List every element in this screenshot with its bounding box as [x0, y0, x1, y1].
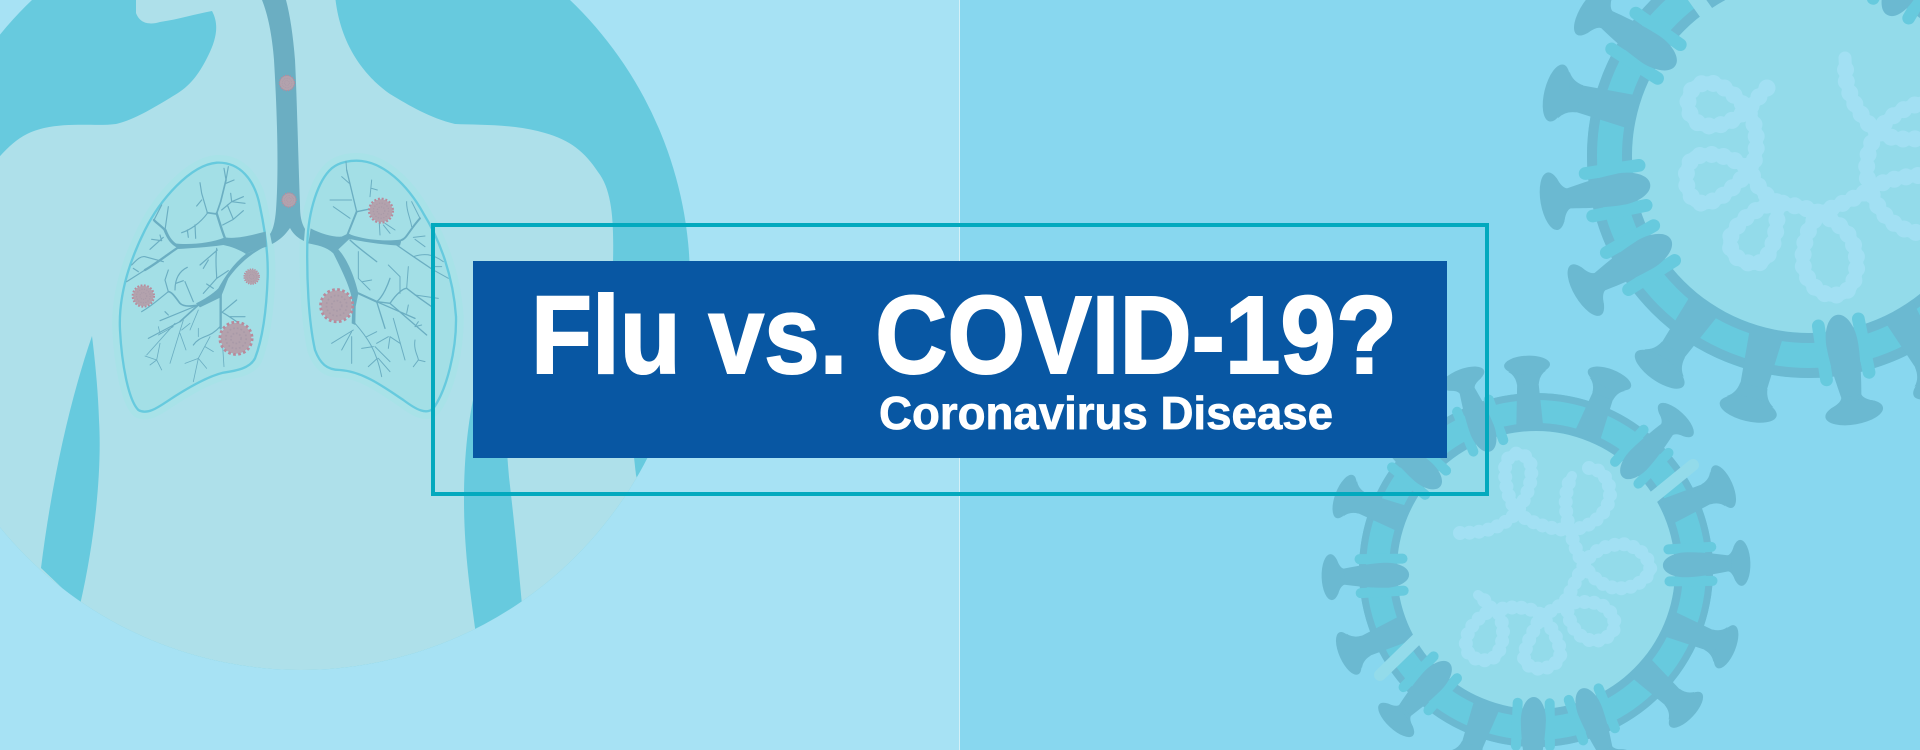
title banner: [473, 261, 1447, 458]
right arm gap: [464, 400, 522, 629]
long spikes: [1536, 0, 1920, 429]
illustration: lower coronavirus: [1321, 355, 1751, 750]
virus core: [1632, 0, 1920, 333]
RNA strand: [1460, 454, 1650, 669]
panel: right background: [960, 0, 1920, 750]
envelope ring: [1359, 393, 1713, 747]
title frame: [433, 225, 1487, 494]
virus particles: [133, 285, 154, 307]
left lung: [120, 163, 268, 412]
virus particles: [369, 199, 393, 223]
envelope ring: [1587, 0, 1920, 378]
trachea: [262, 0, 305, 244]
torso background circle: [0, 0, 690, 670]
long spikes: [1321, 362, 1751, 750]
subtitle: Coronavirus Disease: [879, 387, 1333, 439]
simple spikes: [1538, 0, 1920, 428]
left arm gap: [41, 336, 100, 605]
panel: left background: [0, 0, 960, 750]
torso silhouette: [0, 0, 636, 670]
center divider: [959, 0, 960, 750]
pale bars: [1380, 465, 1693, 675]
bronchial tree: [174, 232, 267, 307]
title: Flu vs. COVID-19?: [531, 274, 1397, 397]
pale bar: [1690, 0, 1715, 25]
right lung: [307, 161, 456, 411]
bronchial tree: [308, 228, 402, 325]
simple spikes: [1328, 355, 1743, 750]
virus particles in trachea: [279, 75, 296, 207]
illustration: upper coronavirus: [1536, 0, 1920, 429]
illustration: human torso with lungs: [0, 0, 700, 700]
RNA strand: [1686, 58, 1920, 295]
virus core: [1397, 431, 1675, 709]
